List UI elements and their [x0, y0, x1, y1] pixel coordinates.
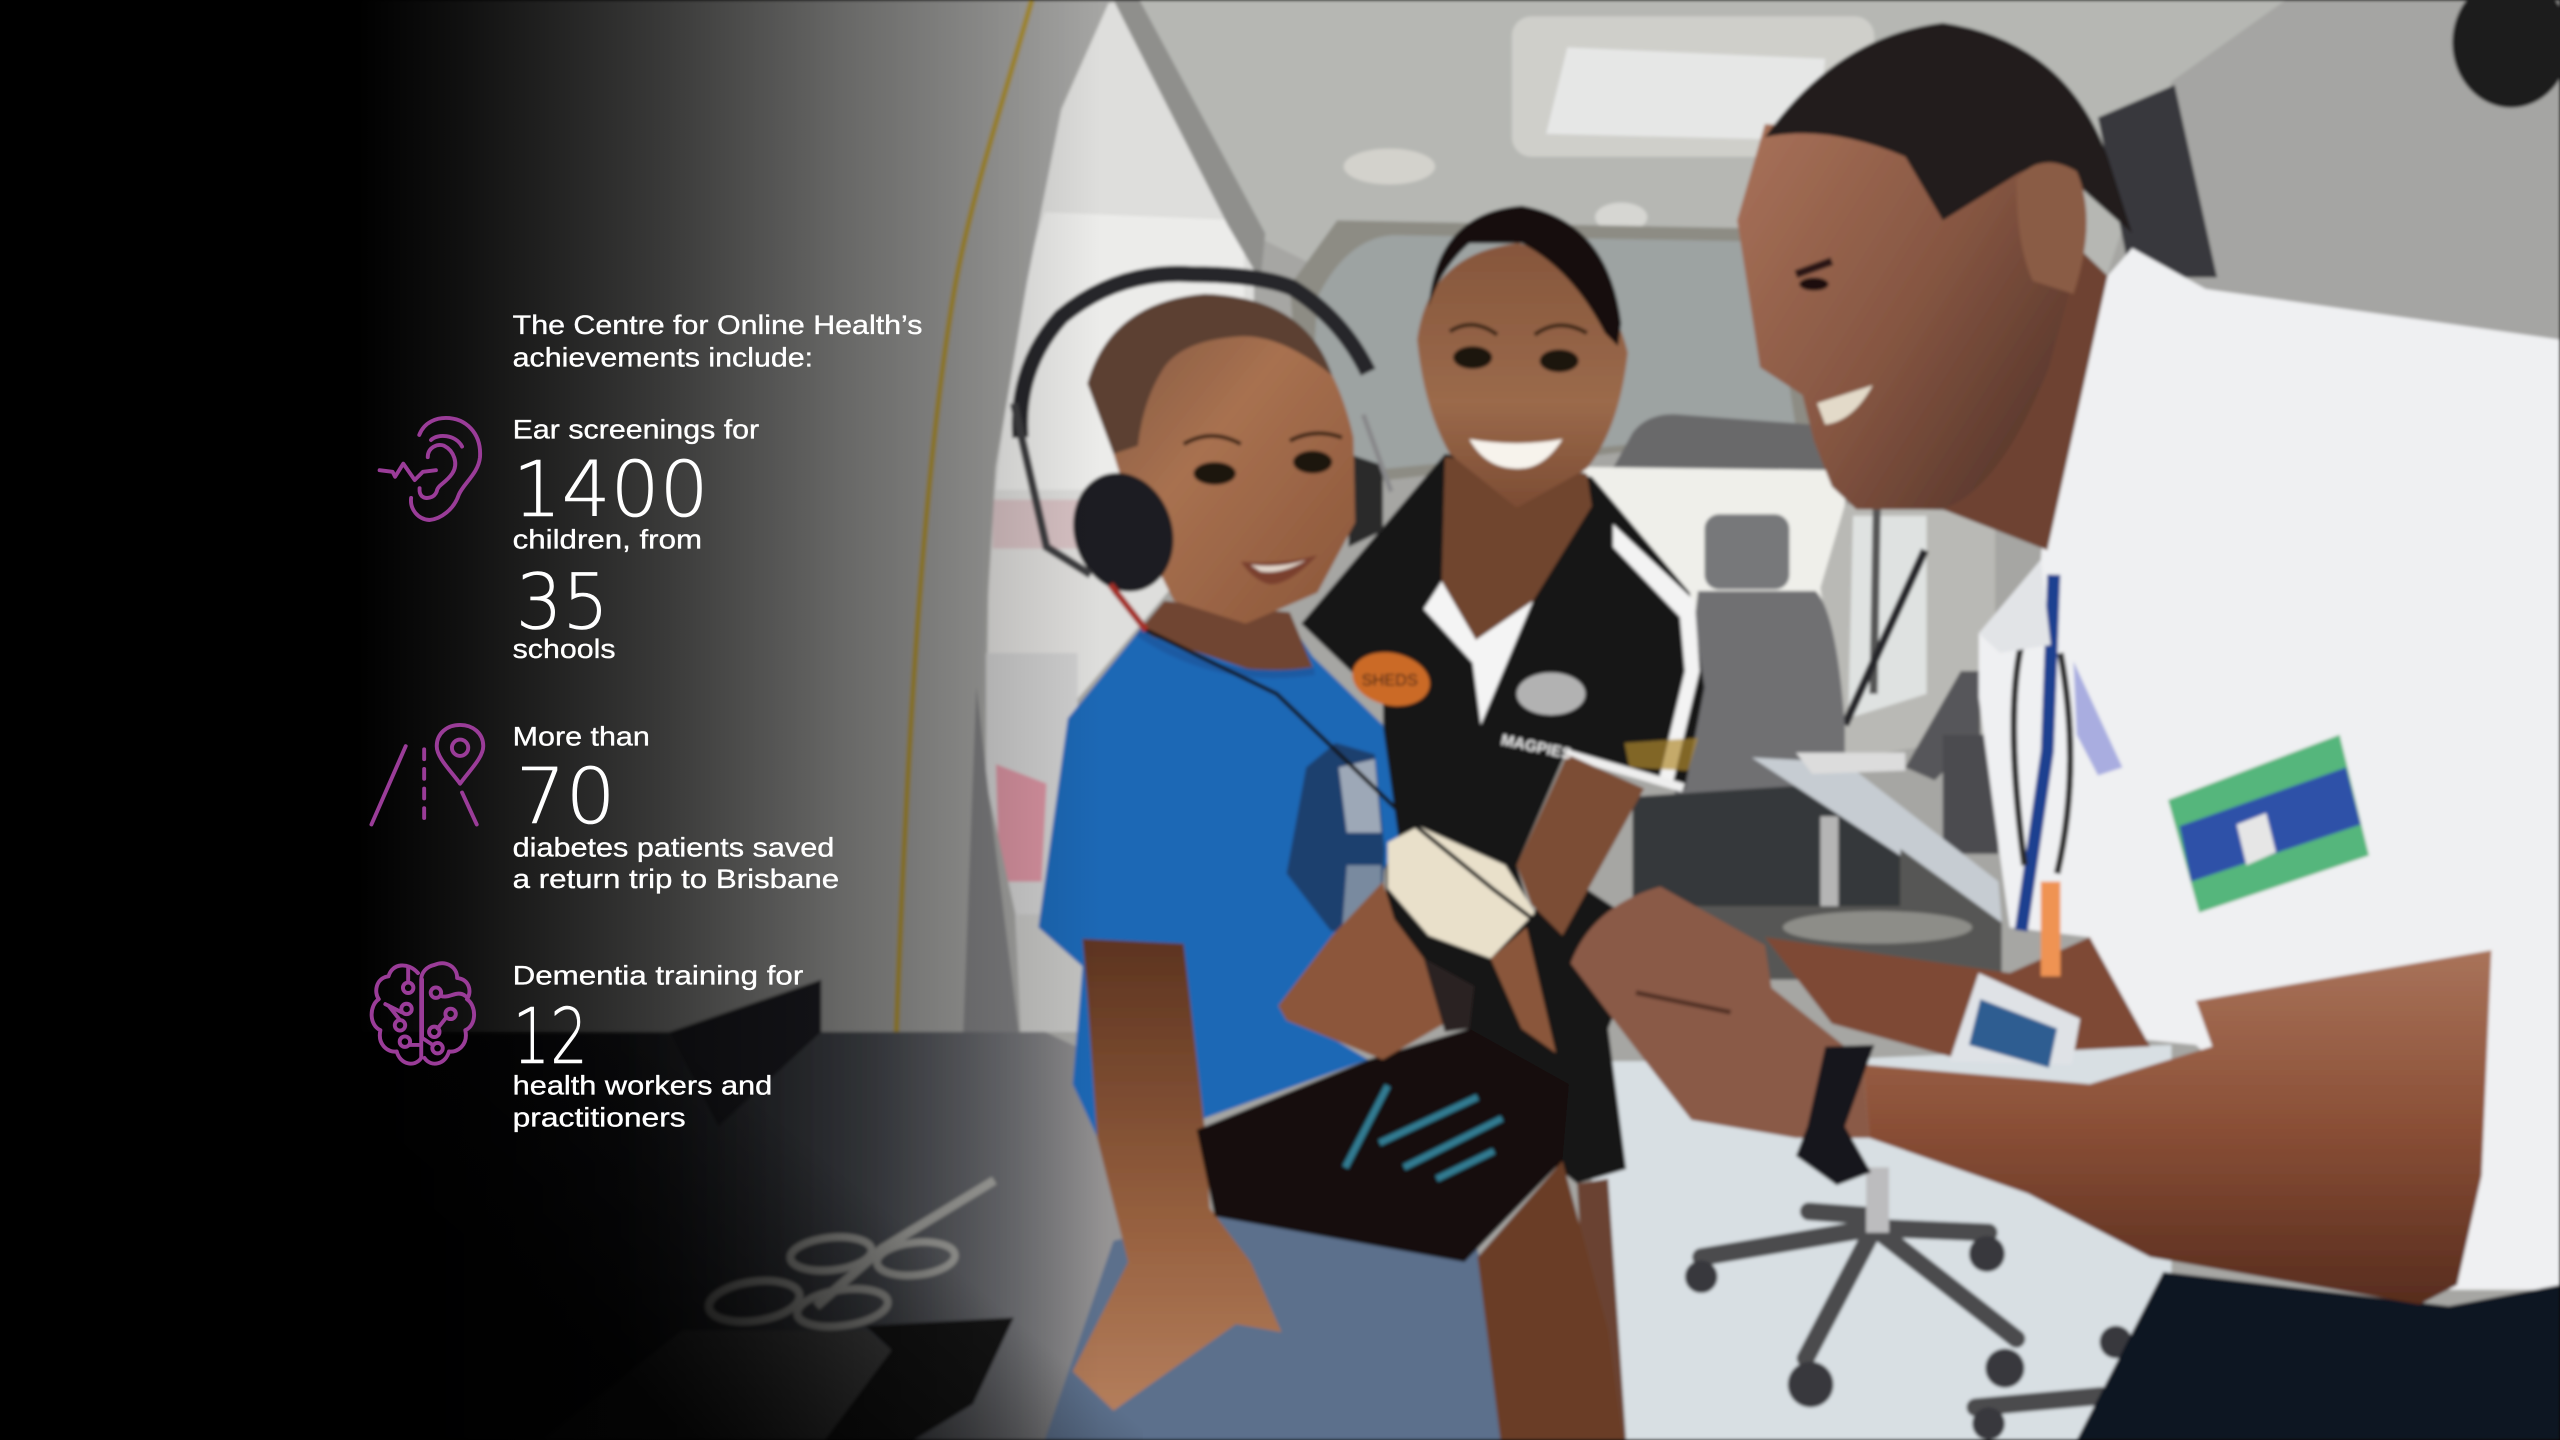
skylight: [1512, 16, 1874, 157]
black polo: [1301, 454, 1704, 1045]
side door frame: [1820, 504, 1995, 759]
man: [1571, 23, 2560, 1440]
man's hair: [1765, 23, 2132, 233]
floor: [1592, 1045, 2171, 1440]
t-shirt logo: [1287, 743, 1384, 939]
diabetes patients stat: 70: [516, 753, 616, 842]
collar: [1138, 632, 1314, 674]
woman's arm: [1517, 754, 1644, 936]
neck: [1442, 457, 1592, 640]
ceiling: [1127, 0, 2286, 278]
intro text: achievements include:: [513, 342, 813, 373]
ear screenings stat: schools: [513, 633, 616, 664]
dementia training stat: 12: [513, 993, 588, 1082]
bandage: [1388, 826, 1535, 958]
windscreen: [1584, 467, 1845, 727]
ear screenings stat: Ear screenings for: [513, 413, 759, 444]
icon: ear with sound wave: [380, 418, 480, 520]
woman's hair: [1429, 206, 1621, 346]
t-shirt: [1038, 632, 1399, 1172]
dome lights: [1344, 149, 1435, 184]
woman's face: [1417, 243, 1628, 508]
laptop: [1905, 671, 1980, 780]
hands: [1571, 887, 1869, 1138]
badge: sheds: [1347, 645, 1435, 713]
speaker: [2452, 0, 2560, 108]
shorts: [1197, 1029, 1569, 1262]
near arm: [1863, 950, 2491, 1304]
diabetes patients stat: a return trip to Brisbane: [513, 863, 839, 894]
leg: [1478, 1161, 1623, 1440]
diabetes patients stat: [513, 720, 839, 894]
man's ear: [2016, 163, 2087, 294]
intro text: [513, 309, 922, 373]
folder: [544, 1331, 891, 1440]
door opening: [983, 0, 1254, 1032]
shorts and leg: [1437, 882, 1649, 1184]
intro text: The Centre for Online Health’s: [513, 309, 922, 340]
white polo: [1979, 248, 2560, 1290]
dementia training stat: Dementia training for: [513, 959, 803, 990]
diabetes patients stat: diabetes patients saved: [513, 831, 834, 862]
head: [1087, 294, 1355, 624]
scissors: [706, 1180, 994, 1332]
curtain: [294, 0, 1109, 1032]
overhead band: [1608, 414, 1976, 490]
man's head: [1737, 124, 2087, 509]
child: [1014, 274, 1636, 1440]
door frame: [1113, 0, 1265, 281]
dementia training stat: health workers and: [513, 1070, 772, 1101]
lanyard and pass: [2021, 575, 2054, 931]
chair base: [1701, 1211, 2101, 1407]
man's neck: [1856, 196, 2108, 550]
trousers: [2077, 1272, 2560, 1440]
table: [0, 1032, 1143, 1440]
panel: achievements text and icons: [371, 309, 922, 1133]
child's hand on bandage: [1491, 927, 1556, 1053]
right wall: [2171, 0, 2560, 351]
watch: [1796, 1045, 1874, 1185]
overlay: table shadow at lower left: [0, 1032, 1143, 1440]
shoulder stripe: [1613, 524, 1700, 780]
woman's hand on child: [1278, 882, 1450, 1060]
ear screenings stat: children, from: [513, 524, 702, 555]
headphones: [1014, 274, 1391, 605]
arm and hand: [1073, 939, 1282, 1411]
seat: [1704, 514, 1789, 589]
badge: magpies: MAGPIES: [1500, 732, 1573, 763]
dementia training stat: [513, 959, 803, 1133]
dark vent: [2098, 85, 2217, 278]
back wall panel: [1290, 220, 1829, 490]
icon: brain circuit: [372, 963, 474, 1064]
badge: sheds: SHEDS: [1362, 672, 1418, 690]
dementia training stat: practitioners: [513, 1102, 686, 1133]
ear screenings stat: [513, 413, 759, 664]
stubble hair: [1087, 294, 1332, 454]
diabetes patients stat: More than: [513, 720, 650, 751]
sleeve patch: [2168, 735, 2369, 913]
headphone cord: [1113, 591, 1636, 993]
ear screenings stat: 1400: [513, 446, 709, 535]
child neck: [1138, 601, 1314, 671]
desk: [1752, 758, 2002, 922]
icon: road with location pin: [371, 725, 483, 826]
right ear cup: [1349, 454, 1383, 547]
white collar: [1424, 581, 1533, 725]
far forearm: [1765, 937, 2150, 1056]
blue upholstered seat: [1045, 1216, 1518, 1440]
badge: magpies: [1500, 673, 1585, 763]
woman: [1301, 206, 1704, 1440]
ear screenings stat: 35: [516, 559, 609, 648]
